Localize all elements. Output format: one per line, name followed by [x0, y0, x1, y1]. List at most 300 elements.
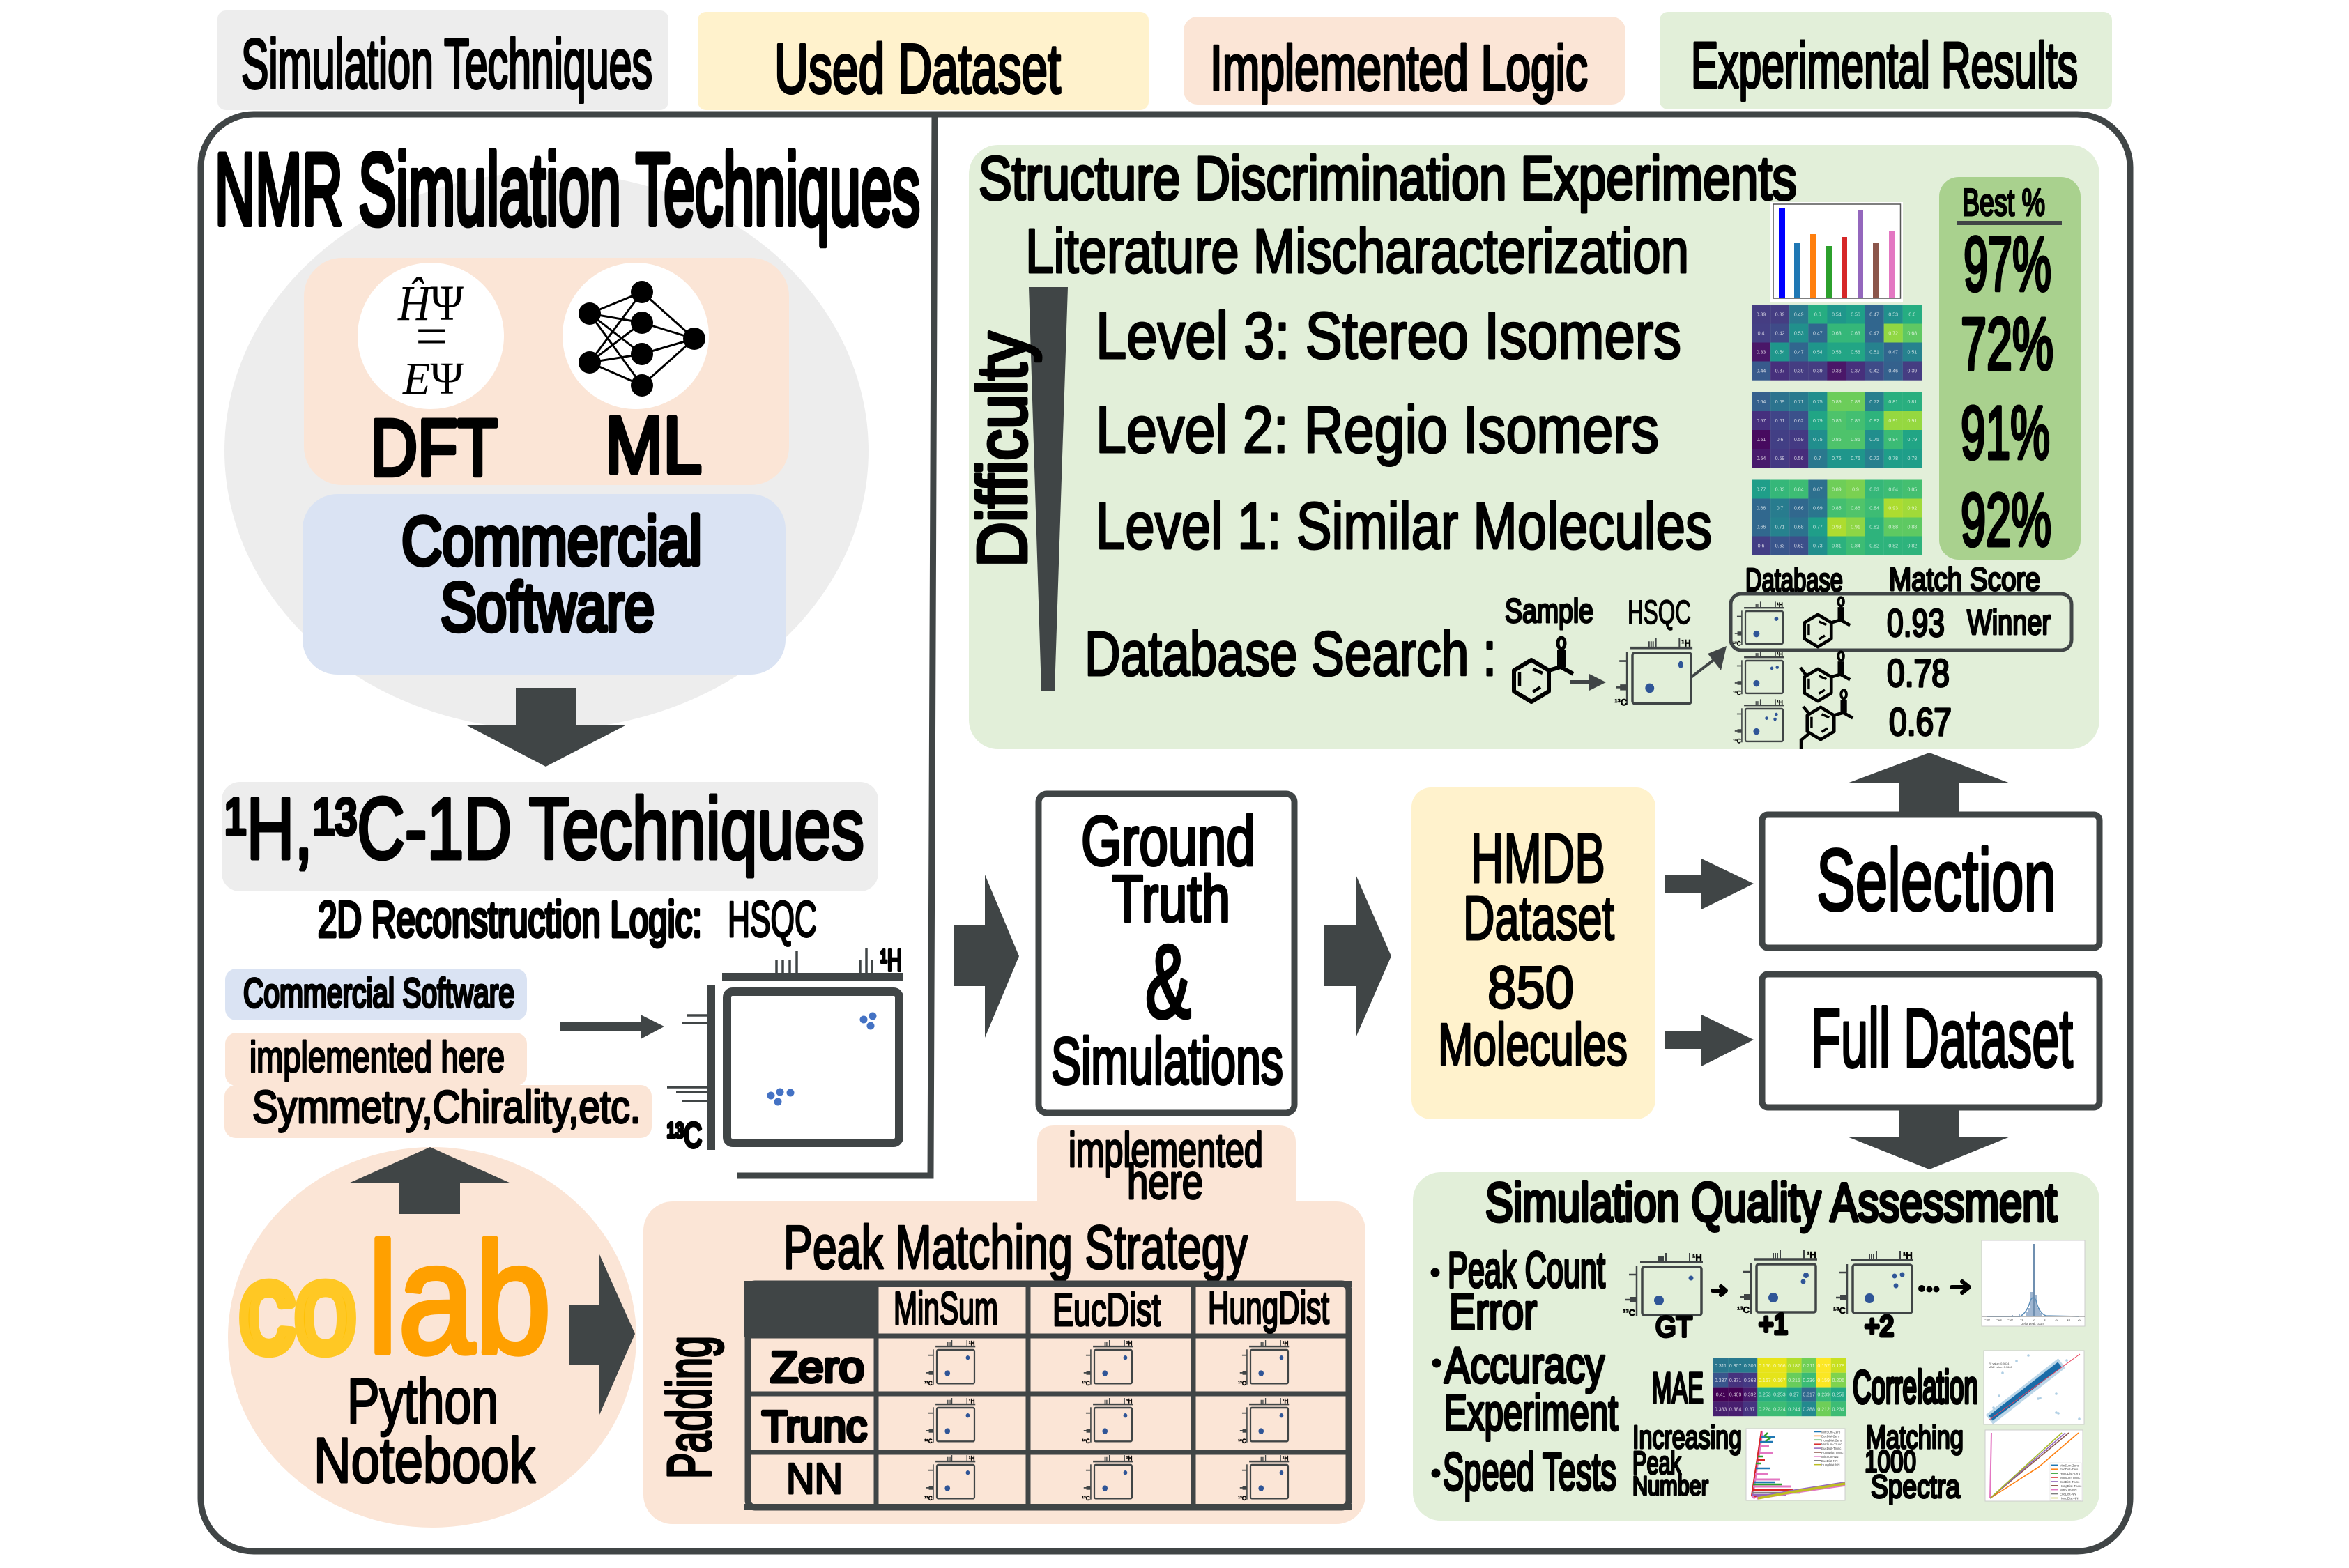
- bullet: Accuracy Experiment: Experiment: [1444, 1385, 1618, 1441]
- heatmap: level 3: 0.39: [1813, 369, 1823, 374]
- heatmap: level 2: 0.71: [1794, 400, 1804, 405]
- icons: HSQC grid: ¹³C: [924, 1380, 933, 1387]
- heatmap: level 2: 0.85: [1851, 419, 1860, 424]
- box: Selection: Selection: [1816, 832, 2056, 929]
- heatmap: level 1: [1752, 479, 1922, 555]
- tab: implemented here: implemented: [1069, 1123, 1263, 1177]
- header: Used Dataset: [698, 12, 1149, 110]
- heatmap: level 3: 0.39: [1775, 312, 1785, 318]
- box: Best percent: Best %: [1962, 180, 2045, 224]
- label: MAE: MAE: [1652, 1365, 1704, 1413]
- heatmap: MAE: 0.167: [1773, 1378, 1786, 1383]
- heatmap: MAE: 0.311: [1715, 1364, 1727, 1369]
- row: Level 3: Level 3: Stereo Isomers: [1096, 299, 1681, 373]
- heatmap: level 2: 0.78: [1907, 456, 1917, 461]
- box: Best percent: 97%: [1964, 222, 2051, 307]
- heatmap: MAE: 0.306: [1744, 1364, 1757, 1369]
- legend: matching chart: MinSum-Zero: [2060, 1463, 2079, 1467]
- heatmap: MAE: 0.337: [1715, 1378, 1727, 1383]
- heatmap: level 3: 0.47: [1794, 350, 1804, 355]
- heatmap: MAE: 0.239: [1817, 1393, 1830, 1398]
- heatmap: level 1: 0.82: [1888, 544, 1898, 549]
- heatmap: level 1: 0.66: [1757, 525, 1766, 530]
- heatmap: level 2: 0.76: [1832, 456, 1842, 461]
- label: Increasing Peak Number: Peak: [1632, 1445, 1682, 1481]
- arrow: up to experiments: [1847, 753, 2010, 812]
- diagram: peak count series: ¹³C: [1623, 1307, 1636, 1318]
- heading: Simulation Quality Assessment: Simulation Quality Assessment: [1485, 1171, 2057, 1233]
- icons: HSQC grid: ¹H: [1283, 1454, 1288, 1462]
- text: 2D reconstruction logic: HSQC: [728, 892, 817, 948]
- heatmap: MAE: 0.409: [1729, 1393, 1741, 1398]
- panel: Ground Truth and Simulations: Truth: [1112, 862, 1230, 936]
- diagram: peak count series: ¹H: [1903, 1250, 1913, 1261]
- diagram: peak count series: [1623, 1250, 1969, 1343]
- box: winner row: [1731, 594, 2072, 650]
- box: Best percent: 92%: [1961, 477, 2051, 562]
- heatmap: level 1: 0.92: [1907, 506, 1917, 512]
- heatmap: level 2: 0.86: [1832, 419, 1842, 424]
- heatmap: level 2: 0.86: [1832, 438, 1842, 443]
- heatmap: level 1: 0.84: [1888, 488, 1898, 492]
- heatmap: level 1: 0.6: [1758, 544, 1764, 549]
- heatmap: level 1: 0.7: [1777, 506, 1784, 512]
- heatmap: level 3: 0.39: [1907, 369, 1917, 374]
- heading: NMR Simulation Techniques: NMR Simulation Techniques: [215, 132, 920, 246]
- heatmap: level 2: 0.76: [1851, 456, 1860, 461]
- tab: implemented here: here: [1127, 1155, 1203, 1209]
- legend: matching chart: HungDist-NN: [2060, 1497, 2079, 1500]
- heatmap: level 3: 0.68: [1907, 332, 1917, 336]
- icons: HSQC grid: ¹H: [969, 1397, 974, 1405]
- row: match 0.78: ¹H: [1777, 651, 1783, 658]
- heatmap: level 2: 0.86: [1851, 438, 1860, 443]
- heatmap: level 1: 0.84: [1851, 544, 1860, 549]
- heatmap: level 3: 0.47: [1813, 332, 1823, 336]
- label: Difficulty with wedge: [963, 287, 1068, 691]
- box: Selection: [1762, 815, 2099, 948]
- icon: colab logo: co: [239, 1238, 356, 1378]
- diagram: peak count series: ¹H: [1692, 1252, 1702, 1263]
- heatmap: level 1: 0.68: [1794, 525, 1804, 530]
- arrow: to Selection: [1665, 859, 1754, 909]
- heatmap: level 2: 0.51: [1757, 438, 1766, 443]
- icons: HSQC grid: ¹³C: [1238, 1495, 1246, 1502]
- heatmap: level 1: 0.88: [1888, 525, 1898, 530]
- heatmap: MAE: 0.166: [1759, 1364, 1771, 1369]
- heatmap: level 2: 0.57: [1757, 419, 1766, 424]
- heatmap: level 1: 0.66: [1757, 506, 1766, 512]
- arrow: to ground truth: [954, 875, 1019, 1038]
- heatmap: level 1: 0.85: [1907, 488, 1917, 492]
- heatmap: level 2: 0.61: [1775, 419, 1785, 424]
- label: Difficulty with wedge: Difficulty: [963, 332, 1041, 567]
- heatmap: level 2: 0.75: [1813, 438, 1823, 443]
- chart: delta peak count histogram: −10: [2007, 1318, 2013, 1321]
- label: Padding: Padding: [655, 1336, 724, 1479]
- legend: matching chart: EucDist-Zero: [2060, 1468, 2079, 1471]
- heatmap: level 1: 0.67: [1813, 488, 1823, 492]
- legend: matching chart: MinSum-NN: [2060, 1489, 2077, 1492]
- heatmap: MAE: 0.317: [1803, 1393, 1815, 1398]
- heatmap: level 2: 0.84: [1888, 438, 1898, 443]
- heatmap: level 1: 0.83: [1775, 488, 1785, 492]
- box: Best percent: 91%: [1961, 390, 2050, 475]
- pill: Commercial Software: [225, 969, 527, 1020]
- heatmap: level 2: 0.79: [1907, 438, 1917, 443]
- heatmap: level 2: 0.59: [1775, 456, 1785, 461]
- heatmap: level 3: 0.47: [1888, 350, 1898, 355]
- heatmap: level 2: 0.91: [1907, 419, 1917, 424]
- arrow: down to assessment: [1847, 1110, 2010, 1169]
- diagram: peak count series: +1: [1759, 1307, 1788, 1340]
- heatmap: MAE: 0.166: [1773, 1364, 1786, 1369]
- heatmap: level 1: 0.89: [1832, 488, 1842, 492]
- heatmap: level 2: 0.54: [1757, 456, 1766, 461]
- icons: HSQC grid: ¹H: [1283, 1339, 1288, 1347]
- table: strategy grid: NN: [786, 1455, 843, 1503]
- heading: Peak Matching Strategy: Peak Matching Strategy: [783, 1213, 1248, 1282]
- panel: HMDB Dataset: 850: [1487, 955, 1574, 1021]
- heatmap: level 2: 0.81: [1888, 400, 1898, 405]
- label: Python Notebook: [314, 1366, 536, 1496]
- box: winner row: 0.93: [1887, 601, 1945, 645]
- label: DFT: DFT: [370, 403, 498, 493]
- row: match 0.67: 0.67: [1889, 700, 1952, 744]
- icons: HSQC grid: ¹H: [969, 1454, 974, 1462]
- heatmap: MAE: 0.383: [1715, 1407, 1727, 1412]
- heatmap: level 3: 0.37: [1851, 369, 1860, 374]
- heatmap: MAE: 0.157: [1817, 1364, 1830, 1369]
- legend: peak number chart: EucDist-Zero: [1821, 1434, 1840, 1438]
- box: Best percent: [1939, 177, 2081, 562]
- table: strategy grid: [744, 1281, 1352, 1510]
- heatmap: level 3: 0.63: [1832, 332, 1842, 336]
- panel: HMDB Dataset: Molecules: [1438, 1012, 1628, 1078]
- bullet: Peak Count Error: Error: [1449, 1284, 1537, 1340]
- heatmap: level 3: 0.47: [1869, 332, 1879, 336]
- heatmap: level 2: 0.81: [1907, 400, 1917, 405]
- heatmap: level 3: 0.33: [1832, 369, 1842, 374]
- heatmap: level 1: 0.9: [1852, 488, 1859, 492]
- header: Experimental Results: Experimental Results: [1691, 30, 2078, 101]
- heatmap: level 1: 0.91: [1851, 525, 1860, 530]
- header: Used Dataset: Used Dataset: [774, 30, 1061, 108]
- heatmap: level 3: 0.4: [1758, 332, 1764, 336]
- legend: peak number chart: MinSum-Zero: [1821, 1430, 1841, 1434]
- panel: Peak Matching Strategy: [643, 1123, 1365, 1524]
- heatmap: MAE: 0.253: [1759, 1393, 1771, 1398]
- arrow: down: [466, 688, 627, 767]
- heatmap: level 3: 0.54: [1775, 350, 1785, 355]
- heatmap: level 3: 0.53: [1888, 312, 1898, 318]
- heatmap: MAE: 0.206: [1832, 1378, 1844, 1383]
- heatmap: level 3: 0.42: [1775, 332, 1785, 336]
- diagram: database search workflow: [1505, 561, 2072, 749]
- heatmap: MAE: 0.392: [1744, 1393, 1757, 1398]
- heatmap: level 1: 0.66: [1794, 506, 1804, 512]
- icons: HSQC grid: ¹³C: [1238, 1380, 1246, 1387]
- table: strategy grid: Zero: [770, 1344, 864, 1392]
- legend: peak number chart: MinSum-NN: [1821, 1455, 1839, 1459]
- icon: Schrodinger equation: ĤΨ: [397, 275, 464, 331]
- icon: sample HSQC: [1614, 638, 1692, 708]
- chart: delta peak count histogram: −15: [1996, 1318, 2002, 1321]
- heatmap: level 3: 0.58: [1832, 350, 1842, 355]
- heatmap: level 1: 0.73: [1813, 544, 1823, 549]
- heatmap: level 1: 0.84: [1869, 506, 1879, 512]
- icons: HSQC grid: ¹H: [1126, 1397, 1132, 1405]
- icons: HSQC grid: ¹³C: [1082, 1495, 1090, 1502]
- panel: NMR Simulation Techniques: [215, 132, 920, 1155]
- heatmap: level 3: 0.58: [1851, 350, 1860, 355]
- icons: HSQC grid: ¹³C: [924, 1495, 933, 1502]
- heatmap: level 1: 0.84: [1794, 488, 1804, 492]
- heading: 1H 13C 1D Techniques: [222, 781, 878, 891]
- heatmap: level 1: 0.93: [1832, 525, 1842, 530]
- pill: Commercial Software: Commercial Software: [243, 971, 514, 1016]
- label: Matching 1000 Spectra: [1865, 1419, 1964, 1505]
- text: 2D reconstruction logic: 2D Reconstruction Logic:: [318, 892, 702, 948]
- heatmap: level 1: 0.82: [1869, 525, 1879, 530]
- heatmap: level 1: 0.83: [1869, 488, 1879, 492]
- legend: peak number chart: MinSum-Trunc: [1821, 1443, 1842, 1446]
- icons: HSQC grid: ¹H: [1126, 1454, 1132, 1462]
- heatmap: level 3: 0.56: [1851, 312, 1860, 318]
- row: match 0.78: ¹³C: [1733, 689, 1741, 697]
- heatmap: level 1: 0.81: [1832, 544, 1842, 549]
- heatmap: level 3: 0.63: [1851, 332, 1860, 336]
- chart: HSQC spectrum: [667, 944, 903, 1155]
- chart: speed vs increasing peak number: [1746, 1429, 1845, 1500]
- chart: correlation scatter: R² value: 0.9874: [1989, 1362, 2010, 1365]
- diagram: peak count series: +2: [1865, 1309, 1894, 1342]
- labels: workflow columns: Database: [1745, 562, 1843, 598]
- bullet: Accuracy Experiment: Accuracy: [1444, 1338, 1605, 1394]
- chart: delta peak count histogram: 5: [2044, 1318, 2046, 1321]
- heatmap: level 2: 0.56: [1794, 456, 1804, 461]
- icon: Schrodinger equation: [358, 263, 504, 409]
- panel: HMDB Dataset: Dataset: [1463, 884, 1614, 953]
- header: Implemented Logic: [1184, 17, 1625, 105]
- label: Python Notebook: Notebook: [314, 1425, 536, 1496]
- legend: matching chart: HungDist-Zero: [2060, 1472, 2081, 1475]
- icons: HSQC grid: ¹H: [969, 1339, 974, 1347]
- pill: implemented here: implemented here: [250, 1033, 505, 1082]
- heatmap: MAE: 0.159: [1817, 1378, 1830, 1383]
- heatmap: MAE: 0.288: [1803, 1407, 1815, 1412]
- chart: correlation scatter: MAE value: 0.1660: [1989, 1365, 2013, 1369]
- icons: HSQC grid: ¹³C: [1082, 1438, 1090, 1445]
- chart: HSQC spectrum: ¹H: [880, 944, 902, 978]
- row: match 0.67: ¹H: [1777, 699, 1783, 706]
- legend: matching chart: EucDist-NN: [2060, 1493, 2076, 1496]
- heatmap: level 2: [1752, 392, 1922, 468]
- heatmap: level 1: 0.88: [1907, 525, 1917, 530]
- label: Increasing Peak Number: [1632, 1419, 1742, 1501]
- heatmap: MAE: 0.236: [1803, 1378, 1815, 1383]
- heatmap: MAE: 0.363: [1744, 1378, 1757, 1383]
- heatmap: level 2: 0.91: [1888, 419, 1898, 424]
- heatmap: level 2: 0.62: [1794, 419, 1804, 424]
- chart: delta peak count histogram: 10: [2055, 1318, 2059, 1321]
- legend: peak number chart: [1814, 1430, 1844, 1467]
- heatmap: level 2: 0.64: [1757, 400, 1766, 405]
- heatmap: level 2: 0.79: [1813, 419, 1823, 424]
- chart: delta peak count histogram: −20: [1984, 1318, 1990, 1321]
- heatmap: MAE: 0.224: [1773, 1407, 1786, 1412]
- diagram: peak count series: ¹³C: [1833, 1305, 1846, 1316]
- label: Increasing Peak Number: Increasing: [1632, 1419, 1742, 1455]
- heatmap: level 3: 0.33: [1757, 350, 1766, 355]
- row: match 0.67: [1733, 690, 1952, 749]
- heatmap: level 3: [1752, 305, 1922, 381]
- heatmap: MAE: 0.41: [1716, 1393, 1725, 1398]
- heatmap: level 2: 0.89: [1851, 400, 1860, 405]
- heatmap: MAE: 0.244: [1788, 1407, 1800, 1412]
- heatmap: level 2: 0.82: [1869, 419, 1879, 424]
- icon: Schrodinger equation: EΨ: [402, 353, 464, 404]
- labels: workflow columns: Match Score: [1889, 561, 2040, 597]
- bullet: Accuracy Experiment: [1432, 1338, 1618, 1441]
- heatmap: level 2: 0.75: [1813, 400, 1823, 405]
- heatmap: MAE: 0.259: [1832, 1393, 1844, 1398]
- legend: peak number chart: HungDist-Zero: [1821, 1438, 1842, 1442]
- header: Simulation Techniques: [217, 10, 668, 110]
- chart: delta peak count histogram: 15: [2067, 1318, 2071, 1321]
- arrow: up: [349, 1147, 511, 1214]
- legend: peak number chart: HungDist-Trunc: [1821, 1451, 1844, 1454]
- heatmap: level 2: 0.6: [1777, 438, 1784, 443]
- diagram: peak count series: ¹H: [1807, 1250, 1816, 1260]
- heatmap: level 3: 0.53: [1794, 332, 1804, 336]
- box: Full Dataset: [1762, 974, 2099, 1107]
- heatmap: MAE: 0.307: [1729, 1364, 1741, 1369]
- arrow: HSQC to database: [1691, 646, 1727, 677]
- box: winner row: Winner: [1967, 603, 2051, 642]
- row: Level 2: Level 2: Regio Isomers: [1096, 393, 1659, 467]
- bullet: Peak Count Error: [1430, 1243, 1605, 1340]
- heatmap: level 1: 0.86: [1851, 506, 1860, 512]
- row: match 0.67: ¹³C: [1733, 737, 1741, 745]
- heatmap: MAE: 0.253: [1773, 1393, 1786, 1398]
- heatmap: level 1: 0.63: [1775, 544, 1785, 549]
- heatmap: MAE: 0.234: [1832, 1407, 1844, 1412]
- heatmap: level 3: 0.54: [1813, 350, 1823, 355]
- panel: Structure Discrimination Experiments: [963, 144, 2099, 749]
- pill: symmetry, chirality: Symmetry,Chirality,etc.: [252, 1081, 641, 1132]
- icon: colab logo: lab: [367, 1210, 551, 1386]
- table: strategy grid: Trunc: [762, 1403, 867, 1451]
- label: Increasing Peak Number: Number: [1632, 1472, 1708, 1501]
- heatmap: level 1: 0.82: [1907, 544, 1917, 549]
- icons: HSQC grid: ¹³C: [1238, 1438, 1246, 1445]
- heatmap: level 2: 0.75: [1869, 438, 1879, 443]
- icon: sample HSQC: ¹³C: [1614, 697, 1628, 708]
- heatmap: MAE: [1713, 1358, 1846, 1416]
- heatmap: MAE: 0.27: [1789, 1393, 1799, 1398]
- labels: workflow columns: [1505, 561, 2040, 631]
- chart: literature bar chart: [1770, 202, 1903, 302]
- arrow: right: [569, 1254, 635, 1415]
- legend: matching chart: HungDist-Trunc: [2060, 1484, 2082, 1488]
- heatmap: level 3: 0.51: [1869, 350, 1879, 355]
- heatmap: MAE: 0.224: [1759, 1407, 1771, 1412]
- pill: implemented here: [225, 1033, 527, 1086]
- panel: Ground Truth and Simulations: Ground: [1081, 802, 1255, 880]
- table: strategy grid: MinSum: [894, 1282, 998, 1334]
- panel: Ground Truth and Simulations: &: [1145, 923, 1191, 1040]
- label: ML: ML: [605, 401, 702, 490]
- heatmap: level 1: 0.71: [1775, 525, 1785, 530]
- heatmap: level 3: 0.6: [1814, 312, 1821, 318]
- heatmap: level 2: 0.59: [1794, 438, 1804, 443]
- icons: HSQC grid: ¹H: [1283, 1397, 1288, 1405]
- heatmap: level 3: 0.51: [1907, 350, 1917, 355]
- heatmap: level 2: 0.7: [1814, 456, 1821, 461]
- legend: peak number chart: EucDist-NN: [1821, 1459, 1838, 1463]
- heatmap: level 3: 0.42: [1869, 369, 1879, 374]
- heatmap: MAE: 0.167: [1759, 1378, 1771, 1383]
- icon: sample molecule: [1514, 638, 1573, 702]
- tab: implemented here: [1037, 1123, 1296, 1209]
- chart: matching 1000 spectra: [1985, 1430, 2083, 1501]
- heatmap: level 1: 0.93: [1888, 506, 1898, 512]
- legend: matching chart: MinSum-Trunc: [2060, 1476, 2081, 1479]
- box: Best percent: 72%: [1961, 303, 2053, 385]
- diagram: peak count series: GT: [1655, 1310, 1692, 1343]
- heatmap: MAE: 0.211: [1803, 1364, 1815, 1369]
- heatmap: level 3: 0.44: [1757, 369, 1766, 374]
- row: Level 1: Level 1: Similar Molecules: [1096, 489, 1712, 563]
- label: Matching 1000 Spectra: Matching: [1866, 1419, 1964, 1455]
- panel: HMDB Dataset: HMDB: [1471, 820, 1605, 898]
- main rounded frame with divider: [201, 114, 2130, 1551]
- header: Experimental Results: [1660, 12, 2112, 109]
- heatmap: level 3: 0.39: [1794, 369, 1804, 374]
- heatmap: level 2: 0.72: [1869, 456, 1879, 461]
- box: winner row: ¹³C: [1733, 640, 1741, 647]
- chart: delta peak count histogram: −5: [2020, 1318, 2024, 1321]
- label: Matching 1000 Spectra: 1000: [1865, 1445, 1916, 1479]
- bullet: Peak Count Error: Peak Count: [1448, 1243, 1605, 1298]
- bullet: Speed Tests: [1432, 1443, 1616, 1502]
- heatmap: MAE: 0.215: [1788, 1378, 1800, 1383]
- legend: matching chart: [2050, 1463, 2082, 1500]
- heatmap: level 3: 0.47: [1869, 312, 1879, 318]
- chart: correlation scatter: [1984, 1351, 2084, 1424]
- heading: 1H 13C 1D Techniques: ¹H,¹³C-1D Techniques: [224, 781, 864, 877]
- heatmap: level 3: 0.6: [1908, 312, 1915, 318]
- icon: Schrodinger equation: =: [415, 306, 448, 367]
- heatmap: level 3: 0.37: [1775, 369, 1785, 374]
- box: winner row: ¹H: [1777, 601, 1783, 608]
- box: Commercial Software: Software: [441, 569, 655, 645]
- legend: matching chart: EucDist-Trunc: [2060, 1480, 2080, 1484]
- heatmap: MAE: 0.384: [1729, 1407, 1741, 1412]
- legend: peak number chart: HungDist-NN: [1821, 1463, 1840, 1467]
- row: match 0.78: 0.78: [1887, 651, 1950, 695]
- arrow: sample to HSQC: [1570, 674, 1606, 691]
- icon: neural network: [563, 263, 709, 409]
- box: Full Dataset: Full Dataset: [1811, 992, 2073, 1085]
- heatmap: level 1: 0.69: [1813, 506, 1823, 512]
- heatmap: level 1: 0.62: [1794, 544, 1804, 549]
- heatmap: MAE: 0.371: [1729, 1378, 1741, 1383]
- heatmap: level 2: 0.78: [1888, 456, 1898, 461]
- chart: delta peak count histogram: 20: [2078, 1318, 2082, 1321]
- heatmap: level 1: 0.85: [1832, 506, 1842, 512]
